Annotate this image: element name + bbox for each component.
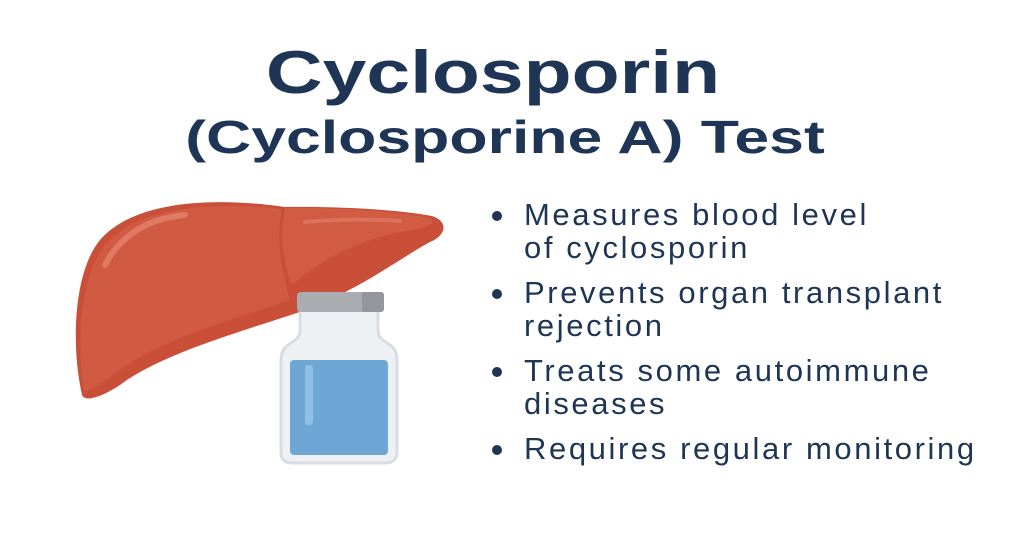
illustration: liver and vial	[76, 202, 444, 464]
bullet 2	[490, 276, 977, 342]
title: Cyclosporin	[266, 39, 720, 106]
bullet 2: Prevents organ transplant	[524, 275, 944, 310]
bullet 3	[490, 354, 977, 420]
bullet 1	[490, 198, 977, 264]
subtitle: (Cyclosporine A) Test	[185, 111, 825, 163]
bullet 3: diseases	[524, 386, 667, 421]
bullet 3: Treats some autoimmune	[524, 353, 932, 388]
bullet 4: Requires regular monitoring	[524, 431, 977, 466]
icon: vial	[281, 292, 397, 463]
bullet 1: Measures blood level	[524, 197, 869, 232]
bullet list	[492, 197, 977, 466]
icon: liver	[76, 202, 444, 398]
bullet 1: of cyclosporin	[524, 230, 750, 265]
bullet 2: rejection	[524, 308, 665, 343]
